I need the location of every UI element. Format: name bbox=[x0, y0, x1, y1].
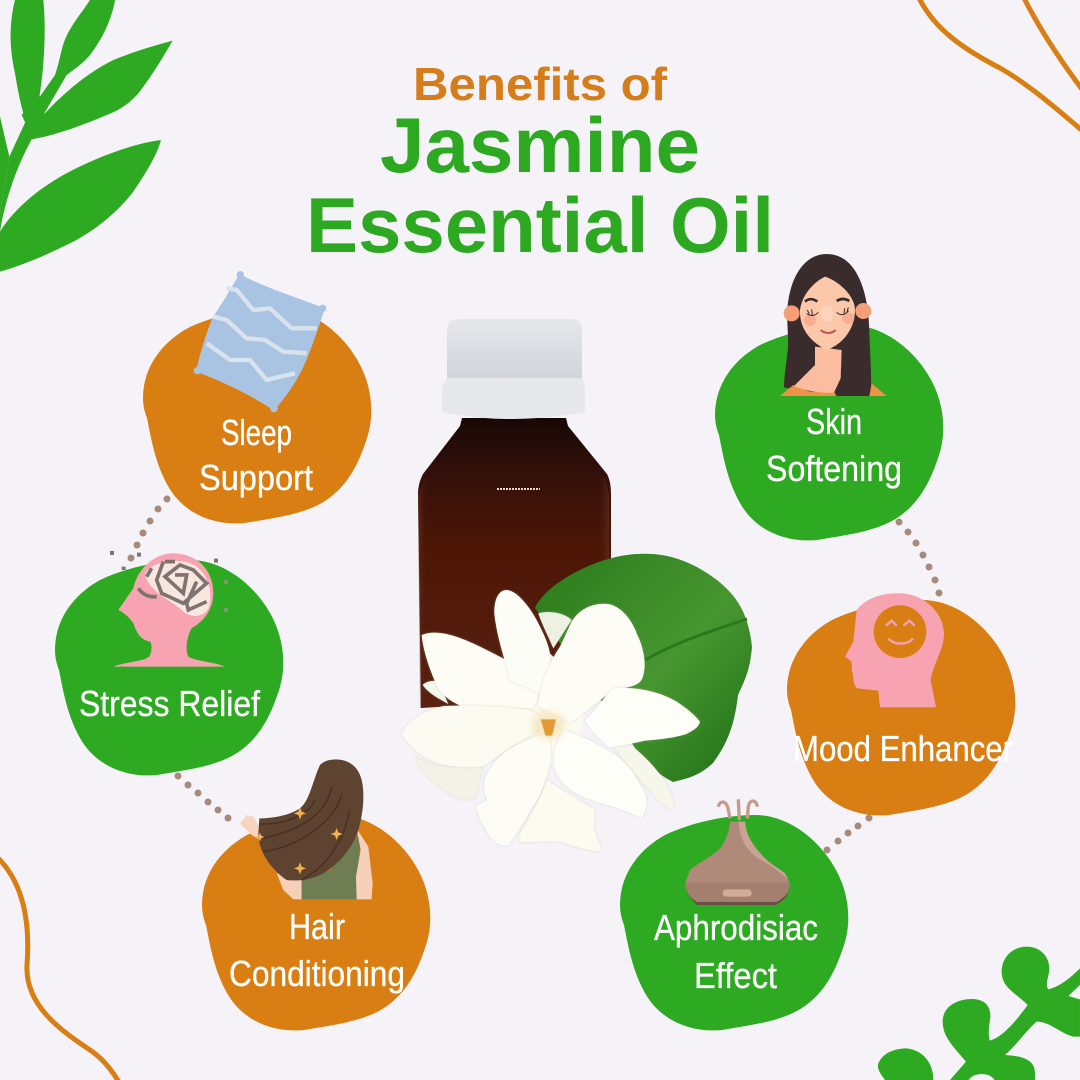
title line: Benefits of: Benefits of bbox=[413, 58, 668, 110]
label: Skin Softening bbox=[766, 401, 902, 489]
blob: stress bbox=[55, 560, 283, 775]
jasmine leaf bbox=[535, 554, 752, 782]
flower centre bbox=[532, 711, 565, 739]
icon: woman with long hair bbox=[240, 760, 373, 899]
jasmine flower bbox=[402, 590, 700, 852]
bottle cap bbox=[447, 319, 582, 390]
label: Hair Conditioning bbox=[229, 906, 405, 994]
label: Sleep Support: Support bbox=[199, 457, 313, 498]
blob: mood bbox=[787, 600, 1015, 815]
decoration: bottom-left orange curve bbox=[0, 858, 120, 1080]
panel: aphrodisiac effect bbox=[620, 799, 848, 1030]
dotted connector: stress to hair bbox=[174, 772, 232, 822]
dotted connector: sleep to stress bbox=[128, 496, 170, 562]
icon: aroma diffuser bbox=[685, 799, 790, 905]
blob: sleep bbox=[143, 308, 371, 523]
label: Aphrodisiac Effect: Aphrodisiac bbox=[654, 907, 818, 948]
bottle edge highlight bbox=[418, 478, 609, 708]
bottle body bbox=[418, 418, 611, 708]
icon: smiling mind head bbox=[845, 593, 944, 707]
panel: skin softening bbox=[715, 254, 943, 540]
cap flange bbox=[442, 378, 585, 419]
panel: stress relief bbox=[55, 551, 283, 775]
decoration: top-right orange curves bbox=[919, 0, 1080, 132]
label: Stress Relief: Stress Relief bbox=[79, 683, 261, 724]
panel: sleep support bbox=[143, 271, 371, 523]
icon: woman with closed eyes bbox=[780, 254, 887, 396]
title line: Jasmine: Jasmine bbox=[380, 101, 700, 189]
label: Skin Softening: Skin bbox=[806, 401, 862, 442]
label: Hair Conditioning: Conditioning bbox=[229, 953, 405, 994]
blob: hair bbox=[202, 815, 430, 1030]
panel: mood enhancer bbox=[787, 593, 1015, 815]
bottle glint bbox=[497, 488, 540, 490]
blob: aphrodisiac bbox=[620, 815, 848, 1030]
bottle with cap bbox=[418, 319, 611, 708]
decoration: top-left leaves bbox=[0, 0, 173, 272]
title line: Essential Oil: Essential Oil bbox=[306, 181, 774, 269]
icon: pillow bbox=[194, 271, 326, 412]
blob: skin bbox=[715, 325, 943, 540]
label: Sleep Support: Sleep bbox=[221, 412, 292, 453]
decoration: bottom-right green plant bbox=[878, 947, 1080, 1080]
label: Hair Conditioning: Hair bbox=[289, 906, 345, 947]
label: Aphrodisiac Effect bbox=[654, 907, 818, 996]
label: Mood Enhancer: Mood Enhancer bbox=[793, 728, 1013, 769]
dotted connector: skin to mood bbox=[896, 518, 942, 596]
label: Aphrodisiac Effect: Effect bbox=[694, 955, 777, 996]
panel: hair conditioning bbox=[202, 760, 430, 1030]
label: Sleep Support bbox=[199, 412, 313, 498]
label: Skin Softening: Softening bbox=[766, 448, 902, 489]
icon: head with tangled mind bbox=[110, 551, 228, 667]
dotted connector: mood to aphrodisiac bbox=[824, 814, 872, 854]
title bbox=[306, 58, 774, 269]
